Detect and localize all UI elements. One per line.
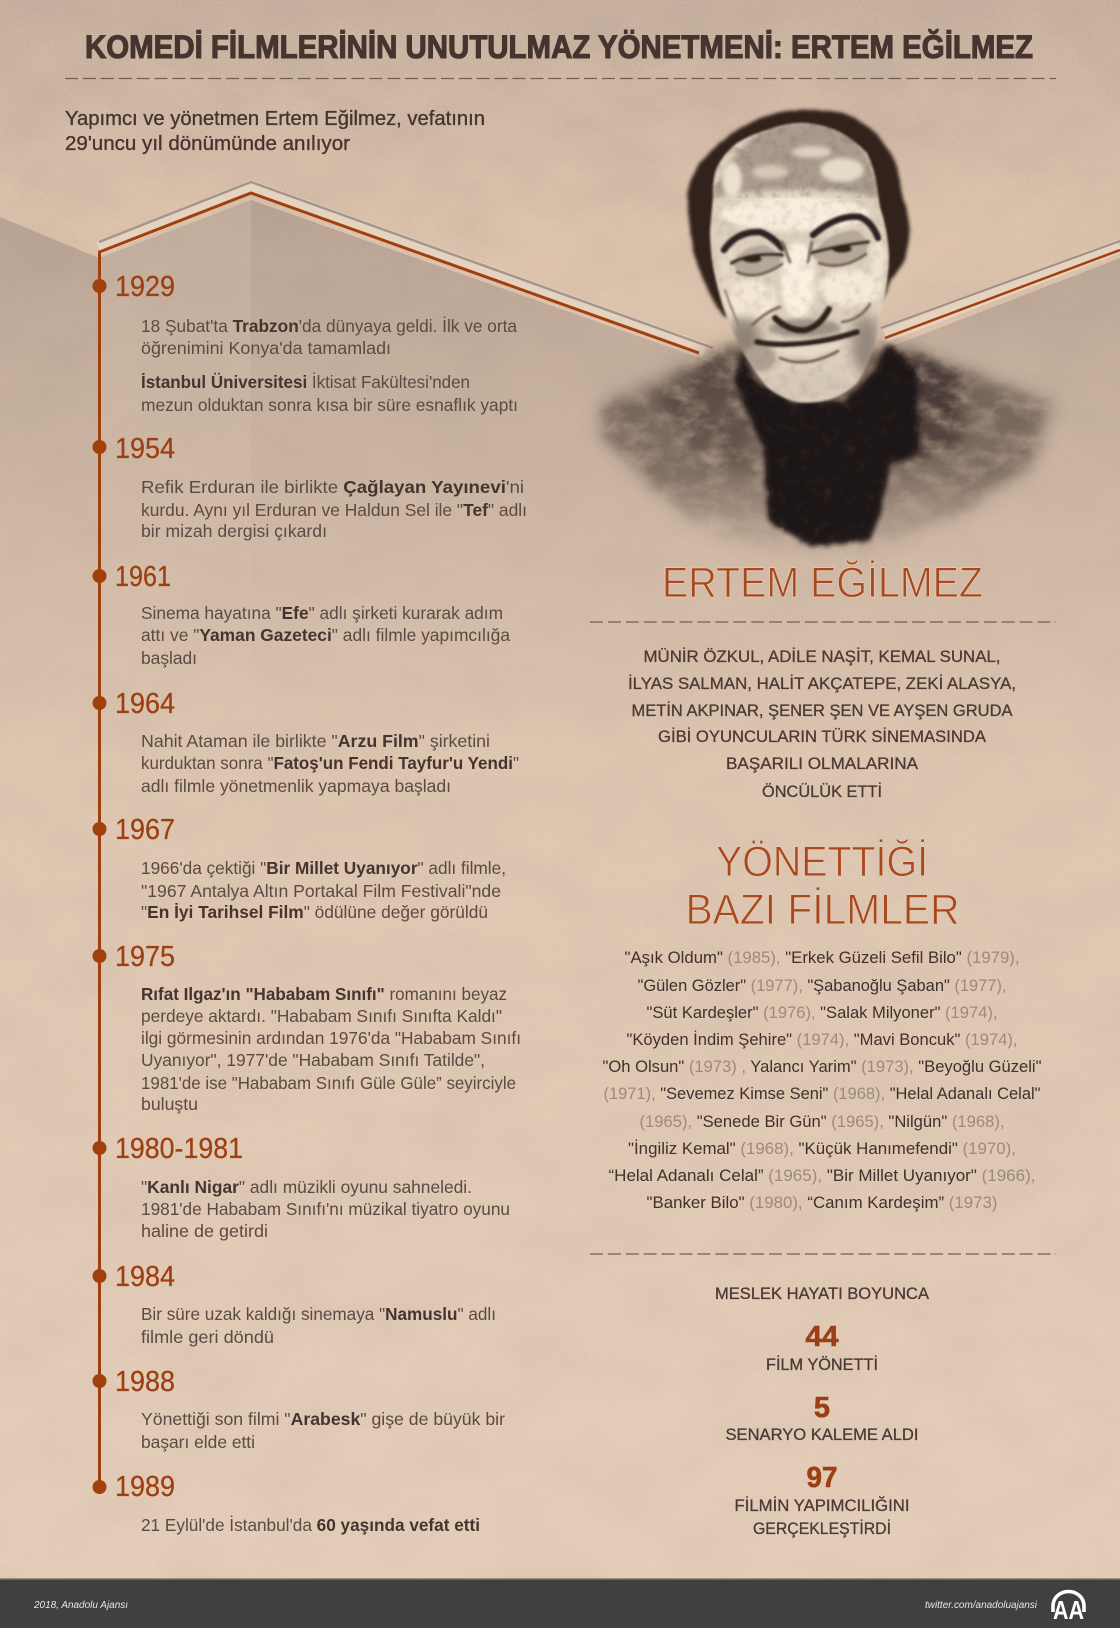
nose and cheek highlights bbox=[781, 242, 815, 318]
1980-1981 entry: haline de getirdi bbox=[141, 1221, 268, 1241]
1929 entry: 18 Şubat'ta Trabzon'da dünyaya geldi. İlk ve orta bbox=[141, 316, 517, 336]
subtitle: 29'uncu yıl dönümünde anılıyor bbox=[65, 132, 350, 155]
1984 entry: filmle geri döndü bbox=[141, 1327, 274, 1347]
films list: "Gülen Gözler" (1977), "Şabanoğlu Şaban" (1977), bbox=[638, 977, 1006, 995]
actors text: İLYAS SALMAN, HALİT AKÇATEPE, ZEKİ ALASYA, bbox=[628, 674, 1016, 693]
1975 entry: Rıfat Ilgaz'ın "Hababam Sınıfı" romanını beyaz bbox=[141, 984, 507, 1004]
subtitle bbox=[65, 107, 485, 155]
films list: “Helal Adanalı Celal” (1965), "Bir Millet Uyanıyor" (1966), bbox=[608, 1167, 1036, 1185]
timeline bbox=[92, 271, 527, 1535]
1984 entry: 1984 bbox=[115, 1261, 175, 1293]
stat: 44 films: 44 bbox=[806, 1321, 838, 1353]
1954 entry: 1954 bbox=[115, 433, 175, 465]
1988 entry: başarı elde etti bbox=[141, 1432, 255, 1452]
1989 entry: 1989 bbox=[115, 1471, 175, 1503]
1929 entry: İstanbul Üniversitesi İktisat Fakültesi'nden bbox=[141, 372, 470, 392]
1929 entry: 1929 bbox=[115, 271, 175, 303]
1967 entry: "1967 Antalya Altın Portakal Film Festivali"nde bbox=[141, 881, 501, 901]
stat: 97 productions: FİLMİN YAPIMCILIĞINI bbox=[734, 1496, 910, 1515]
1961 entry bbox=[92, 561, 510, 668]
1988 entry: Yönettiği son filmi "Arabesk" gişe de büyük bir bbox=[141, 1409, 505, 1429]
films list: "İngiliz Kemal" (1968), "Küçük Hanımefendi" (1970), bbox=[628, 1139, 1016, 1158]
1961 entry: başladı bbox=[141, 648, 197, 668]
stat: 97 productions: 97 bbox=[806, 1462, 838, 1494]
1961 entry: Sinema hayatına "Efe" adlı şirketi kurarak adım bbox=[141, 603, 503, 623]
actors text: BAŞARILI OLMALARINA bbox=[726, 754, 919, 773]
films heading: YÖNETTİĞİ bbox=[716, 838, 928, 886]
stats heading: MESLEK HAYATI BOYUNCA bbox=[715, 1284, 930, 1303]
1980-1981 entry bbox=[92, 1133, 510, 1241]
stat: 97 productions: GERÇEKLEŞTİRDİ bbox=[753, 1519, 891, 1538]
films list: "Banker Bilo" (1980), “Canım Kardeşim” (1973) bbox=[646, 1194, 998, 1212]
1975 entry: Uyanıyor", 1977'de "Hababam Sınıfı Tatilde", bbox=[141, 1050, 485, 1070]
films heading: BAZI FİLMLER bbox=[686, 886, 960, 934]
1954 entry bbox=[92, 433, 527, 541]
1980-1981 entry: 1980-1981 bbox=[115, 1133, 243, 1165]
1961 entry: attı ve "Yaman Gazeteci" adlı filmle yapımcılığa bbox=[141, 625, 510, 645]
stat: 5 scripts: 5 bbox=[814, 1392, 830, 1424]
stat: 97 productions bbox=[734, 1462, 910, 1538]
stat: 5 scripts: SENARYO KALEME ALDI bbox=[726, 1425, 918, 1444]
1988 entry bbox=[92, 1366, 505, 1452]
actors text: GİBİ OYUNCULARIN TÜRK SİNEMASINDA bbox=[658, 727, 987, 746]
1984 entry: Bir süre uzak kaldığı sinemaya "Namuslu" adlı bbox=[141, 1304, 496, 1324]
portrait: Ertem Eğilmez bbox=[600, 109, 1050, 555]
actors text: METİN AKPINAR, ŞENER ŞEN VE AYŞEN GRUDA bbox=[632, 701, 1013, 720]
films list: "Köyden İndim Şehire" (1974), "Mavi Boncuk" (1974), bbox=[626, 1030, 1018, 1049]
name heading: ERTEM EĞİLMEZ bbox=[662, 559, 983, 607]
stat: 44 films bbox=[766, 1321, 878, 1374]
roof shaded panels bbox=[0, 200, 1120, 780]
portrait dark shirt bbox=[735, 345, 918, 545]
subtitle: Yapımcı ve yönetmen Ertem Eğilmez, vefatının bbox=[65, 107, 485, 130]
1975 entry: 1981'de ise "Hababam Sınıfı Güle Güle” seyirciyle bbox=[141, 1073, 516, 1093]
stat: 5 scripts bbox=[726, 1392, 918, 1444]
1964 entry: Nahit Ataman ile birlikte " Arzu Film" şirketini bbox=[141, 731, 490, 751]
films heading bbox=[686, 838, 960, 934]
films list bbox=[602, 949, 1042, 1212]
1988 entry: 1988 bbox=[115, 1366, 175, 1398]
nose, mouth and wrinkles bbox=[725, 242, 870, 362]
footer twitter: twitter.com/anadoluajansi bbox=[925, 1600, 1038, 1611]
footer credit: 2018, Anadolu Ajansı bbox=[33, 1600, 128, 1611]
1954 entry: bir mizah dergisi çıkardı bbox=[141, 521, 327, 541]
1954 entry: Refik Erduran ile birlikte Çağlayan Yayınevi 'ni bbox=[141, 477, 524, 497]
lower face tone bbox=[729, 318, 761, 362]
1975 entry bbox=[92, 941, 521, 1114]
1975 entry: 1975 bbox=[115, 941, 175, 973]
films list: (1971), "Sevemez Kimse Seni" (1968), "Helal Adanalı Celal" bbox=[604, 1085, 1041, 1103]
1961 entry: 1961 bbox=[115, 561, 171, 593]
1984 entry bbox=[92, 1261, 496, 1347]
career stats bbox=[715, 1284, 930, 1538]
1967 entry bbox=[92, 814, 506, 922]
portrait face bbox=[708, 121, 890, 404]
footer bar bbox=[0, 1578, 1120, 1628]
1964 entry bbox=[92, 688, 519, 796]
1954 entry: kurdu. Aynı yıl Erduran ve Haldun Sel ile "Tef" adlı bbox=[141, 500, 527, 520]
1980-1981 entry: "Kanlı Nigar" adlı müzikli oyunu sahneledi. bbox=[141, 1177, 472, 1197]
forehead tone bbox=[712, 123, 880, 198]
1964 entry: kurduktan sonra "Fatoş'un Fendi Tayfur'u Yendi" bbox=[141, 753, 519, 773]
title: KOMEDİ FİLMLERİNİN UNUTULMAZ YÖNETMENİ: ERTEM EĞİLMEZ bbox=[85, 29, 1033, 65]
1989 entry: 21 Eylül'de İstanbul'da 60 yaşında vefat etti bbox=[141, 1515, 480, 1535]
actors text: MÜNİR ÖZKUL, ADİLE NAŞİT, KEMAL SUNAL, bbox=[644, 647, 1000, 666]
1975 entry: buluştu bbox=[141, 1094, 198, 1114]
roof lines bbox=[99, 182, 1120, 1487]
portrait facial features bbox=[724, 217, 878, 362]
1975 entry: ilgi görmesinin ardından 1976'da "Hababam Sınıfı bbox=[141, 1028, 521, 1048]
films list: "Aşık Oldum" (1985), "Erkek Güzeli Sefil Bilo" (1979), bbox=[624, 949, 1020, 967]
1967 entry: 1967 bbox=[115, 814, 175, 846]
portrait jacket bbox=[600, 345, 1050, 555]
1929 entry: mezun olduktan sonra kısa bir süre esnaflık yaptı bbox=[141, 395, 518, 415]
1975 entry: perdeye aktardı. "Hababam Sınıfı Sınıfta Kaldı" bbox=[141, 1006, 502, 1026]
films list: "Oh Olsun" (1973) , Yalancı Yarim" (1973), "Beyoğlu Güzeli" bbox=[602, 1058, 1042, 1076]
1964 entry: 1964 bbox=[115, 688, 175, 720]
1967 entry: 1966'da çektiği "Bir Millet Uyanıyor" adlı filmle, bbox=[141, 858, 506, 878]
1980-1981 entry: 1981'de Hababam Sınıfı'nı müzikal tiyatro oyunu bbox=[141, 1199, 510, 1219]
stat: 44 films: FİLM YÖNETTİ bbox=[766, 1355, 878, 1374]
right eye bbox=[811, 217, 878, 266]
1929 entry: öğrenimini Konya'da tamamladı bbox=[141, 338, 391, 358]
1989 entry bbox=[92, 1471, 480, 1535]
1967 entry: "En İyi Tarihsel Film" ödülüne değer görüldü bbox=[141, 902, 488, 922]
films list: (1965), "Senede Bir Gün" (1965), "Nilgün" (1968), bbox=[640, 1113, 1004, 1131]
left eye bbox=[724, 232, 782, 275]
portrait hair bbox=[688, 109, 910, 330]
actors text bbox=[628, 647, 1016, 801]
actors text: ÖNCÜLÜK ETTİ bbox=[762, 782, 882, 801]
1929 entry bbox=[92, 271, 518, 415]
1964 entry: adlı filmle yönetmenlik yapmaya başladı bbox=[141, 776, 451, 796]
films list: "Süt Kardeşler" (1976), "Salak Milyoner" (1974), bbox=[646, 1004, 997, 1022]
icon: AA logo: AA bbox=[1053, 1595, 1084, 1625]
